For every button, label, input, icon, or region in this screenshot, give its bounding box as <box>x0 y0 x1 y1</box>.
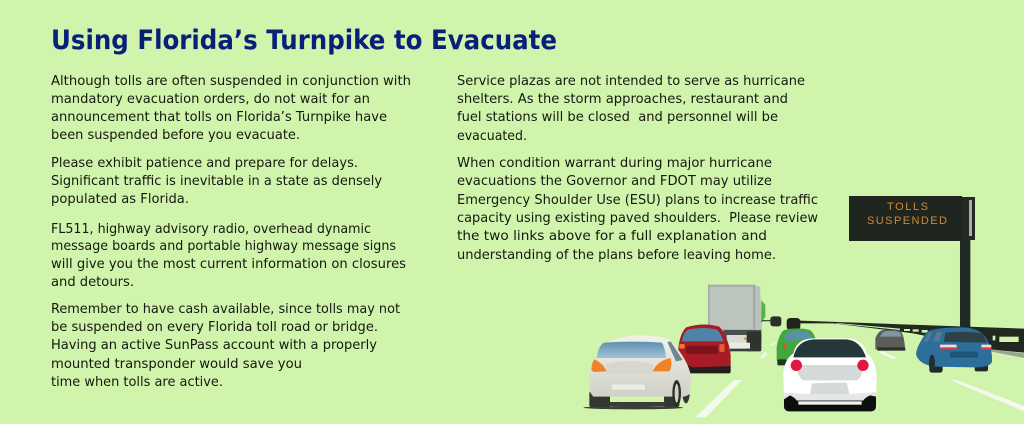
text block: left column <box>51 73 411 390</box>
paragraph: patience: Please exhibit patience and prepare for delays. <box>51 155 358 171</box>
paragraph: information sources: will give you the most current information on closures <box>51 256 406 272</box>
paragraph: tolls: mandatory evacuation orders, do not wait for an <box>51 91 370 107</box>
road lane markings <box>695 342 1024 417</box>
paragraph: emergency shoulder use: the two links above for a full explanation and <box>457 228 767 244</box>
green car <box>777 328 815 365</box>
paragraph: tolls <box>51 73 411 143</box>
overhead sign: tolls suspended: TOLLS <box>887 201 928 213</box>
title: Using Florida’s Turnpike to Evacuate <box>51 25 557 56</box>
paragraph: service plazas <box>457 73 805 144</box>
paragraph: service plazas: Service plazas are not intended to serve as hurricane <box>457 73 805 89</box>
paragraph: cash and SunPass: time when tolls are active. <box>51 374 223 390</box>
paragraph: patience: populated as Florida. <box>51 191 189 207</box>
overhead sign: tolls suspended <box>849 196 975 241</box>
paragraph: emergency shoulder use: understanding of the plans before leaving home. <box>457 247 776 263</box>
illustration: highway scene <box>583 240 1024 417</box>
paragraph: emergency shoulder use: Emergency Shoulder Use (ESU) plans to increase traffic <box>457 192 818 208</box>
truck <box>708 285 771 351</box>
paragraph: emergency shoulder use <box>457 155 818 263</box>
paragraph: cash and SunPass <box>51 301 400 390</box>
overhead sign: tolls suspended: SUSPENDED <box>867 215 947 227</box>
paragraph: service plazas: fuel stations will be closed and personnel will be <box>457 109 778 125</box>
paragraph: tolls: Although tolls are often suspended in conjunction with <box>51 73 411 89</box>
paragraph: emergency shoulder use: capacity using existing paved shoulders. Please review <box>457 210 818 226</box>
paragraph: information sources: and detours. <box>51 274 134 290</box>
white car, centre <box>783 338 877 411</box>
red car <box>678 324 731 373</box>
text block: right column <box>457 73 818 263</box>
paragraph: cash and SunPass: be suspended on every Florida toll road or bridge. <box>51 319 378 335</box>
paragraph: emergency shoulder use: When condition warrant during major hurricane <box>457 155 772 171</box>
paragraph: information sources: FL511, highway advisory radio, overhead dynamic <box>51 221 371 237</box>
paragraph: cash and SunPass: Remember to have cash available, since tolls may not <box>51 301 400 317</box>
paragraph: tolls: been suspended before you evacuate. <box>51 127 300 143</box>
overhead sign post <box>960 240 970 328</box>
paragraph: patience <box>51 155 382 207</box>
paragraph: information sources <box>51 221 406 290</box>
paragraph: information sources: message boards and portable highway message signs <box>51 238 396 254</box>
guard rail <box>800 321 1024 358</box>
paragraph: cash and SunPass: Having an active SunPass account with a properly <box>51 337 377 353</box>
silver car, left <box>583 335 691 409</box>
paragraph: tolls: announcement that tolls on Florida’s Turnpike have <box>51 109 387 125</box>
paragraph: service plazas: shelters. As the storm approaches, restaurant and <box>457 91 788 107</box>
distant cars <box>770 316 800 330</box>
grey distant car <box>875 330 905 351</box>
paragraph: cash and SunPass: mounted transponder would save you <box>51 356 302 372</box>
paragraph: service plazas: evacuated. <box>457 128 527 144</box>
paragraph: patience: Significant traffic is inevitable in a state as densely <box>51 173 382 189</box>
blue car <box>916 327 992 373</box>
paragraph: emergency shoulder use: evacuations the Governor and FDOT may utilize <box>457 173 772 189</box>
